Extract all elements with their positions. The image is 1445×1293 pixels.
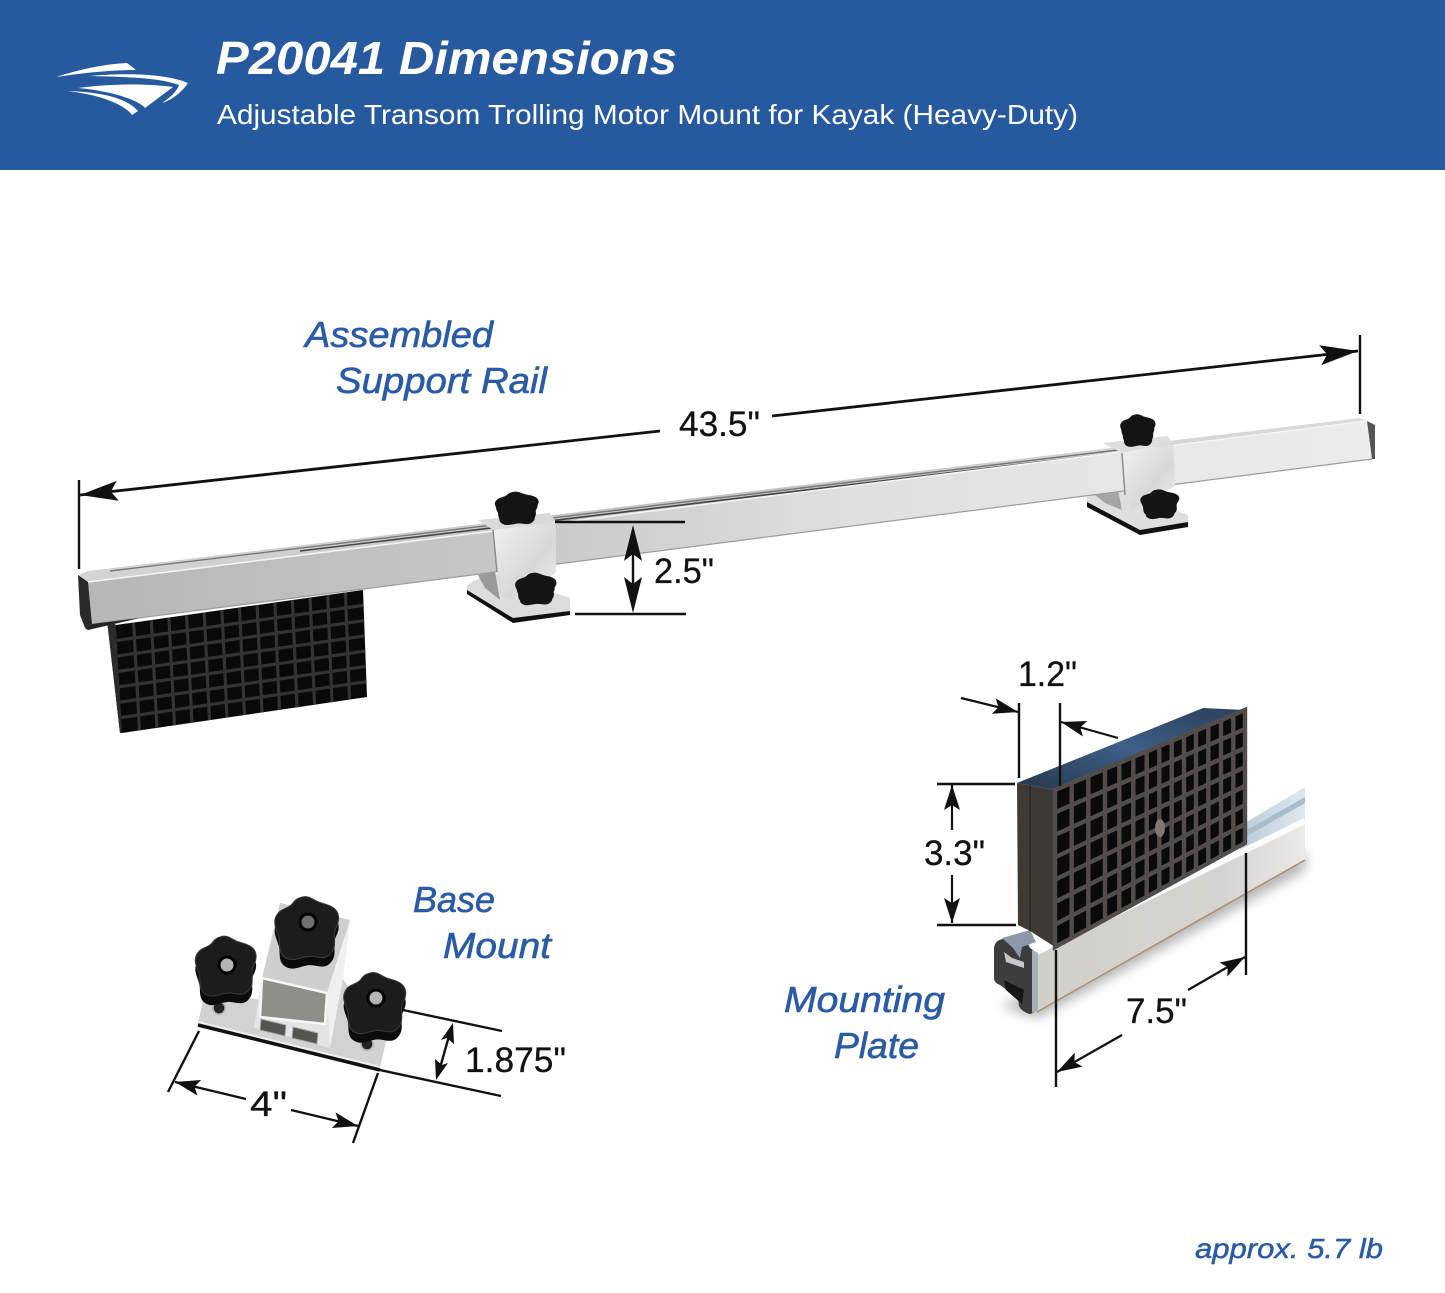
plate side face	[1017, 783, 1055, 947]
dimension: 4 inch width	[168, 1031, 378, 1143]
base mount illustration	[195, 897, 406, 1070]
heading: Base Mount: Mount	[443, 925, 553, 966]
dimension: 2.5 inch height	[555, 522, 714, 614]
dimension: 3.3 inch height: 3.3"	[924, 834, 985, 873]
heading: Mounting Plate	[784, 979, 945, 1066]
dimension: 1.875 inch depth: 1.875"	[465, 1041, 566, 1080]
rail body	[78, 418, 1375, 630]
subtitle: Adjustable Transom Trolling Motor Mount for Kayak (Heavy-Duty)	[217, 99, 1078, 130]
mounting plate on rail	[107, 590, 367, 733]
dimension: 7.5 inch length	[1056, 853, 1246, 1087]
clamp 1	[478, 513, 556, 600]
heading: Base Mount: Base	[413, 879, 495, 920]
assembled support rail illustration	[78, 414, 1375, 733]
header banner	[0, 0, 1445, 170]
dimension: 1.2 inch thickness: 1.2"	[1018, 655, 1077, 694]
heading: Assembled Support Rail: Support Rail	[336, 360, 548, 401]
base plate	[198, 978, 387, 1068]
dimension: 1.2 inch thickness	[961, 655, 1118, 786]
weight note: approx. 5.7 lb	[1195, 1233, 1383, 1264]
title: P20041 Dimensions	[216, 32, 677, 84]
dimension: 2.5 inch height: 2.5"	[654, 552, 714, 591]
rail end cap	[994, 930, 1038, 1014]
dimension: 4 inch width: 4"	[250, 1085, 287, 1124]
dimension: 1.875 inch depth	[380, 1010, 566, 1096]
dimension: 43.5 inch length: 43.5"	[679, 405, 760, 444]
rear base mount 2	[1087, 487, 1188, 535]
shadow	[1000, 850, 1305, 1018]
heading: Assembled Support Rail	[303, 314, 548, 401]
dimension: 3.3 inch height	[924, 784, 1016, 925]
icon: boat logo	[56, 63, 188, 115]
heading: Base Mount	[413, 879, 553, 966]
central block	[254, 903, 350, 1048]
clamp 2	[1103, 436, 1175, 510]
heading: Mounting Plate: Mounting	[784, 979, 945, 1020]
plate top face	[1017, 708, 1245, 790]
dimension: 43.5 inch length	[79, 335, 1360, 569]
plate grid face	[1055, 710, 1245, 947]
knobs	[195, 897, 406, 1043]
heading: Assembled Support Rail: Assembled	[303, 314, 494, 355]
mounting plate illustration	[994, 708, 1305, 1018]
rear base mount 1	[467, 572, 570, 623]
dimension: 7.5 inch length: 7.5"	[1126, 992, 1187, 1031]
rail section	[1037, 787, 1305, 1012]
knobs on rail	[495, 414, 1179, 605]
heading: Mounting Plate: Plate	[834, 1025, 919, 1066]
